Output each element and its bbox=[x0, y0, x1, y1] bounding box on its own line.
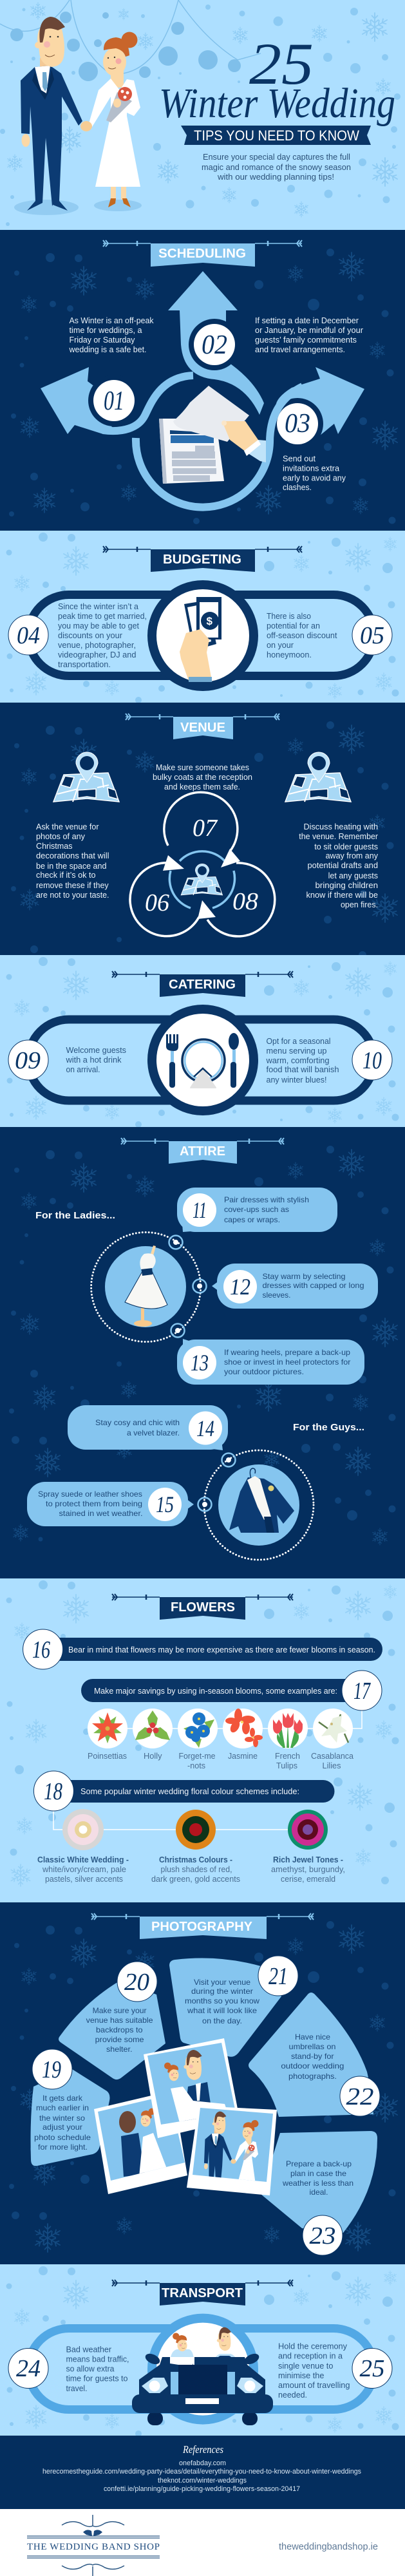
text: tip 24: time for guests to bbox=[66, 2374, 128, 2383]
segment: tip 19: for more light. bbox=[38, 2143, 88, 2152]
labels: flower names: Casablanca bbox=[311, 1752, 353, 1761]
text: tip 25: needed. bbox=[278, 2391, 307, 2400]
text: tip 02: guests’ family commitments bbox=[255, 336, 357, 345]
segment: tip 21: 21 bbox=[268, 1963, 288, 1990]
bubble: tip 11: 11 bbox=[193, 1197, 207, 1223]
text: tip 08: Discuss heating with bbox=[304, 822, 378, 831]
text: tip 25: and reception in a bbox=[278, 2352, 343, 2361]
bubble: tip 12: Stay warm by selecting bbox=[263, 1272, 345, 1281]
heading: transport bbox=[112, 2280, 293, 2306]
text: classic white: white/ivory/cream, pale bbox=[42, 1865, 126, 1874]
text: rich jewel tones: Rich Jewel Tones - bbox=[273, 1855, 343, 1864]
bubble: tip 12 bbox=[212, 1264, 378, 1309]
snow background bbox=[0, 3, 400, 226]
icon: wedding car bbox=[132, 2318, 273, 2425]
panel: footer bbox=[0, 2509, 405, 2576]
label: for the guys: For the Guys... bbox=[293, 1422, 364, 1433]
number 25 bbox=[352, 2348, 392, 2388]
panel: transport bbox=[0, 2264, 405, 2437]
illustration: bride bbox=[80, 32, 142, 211]
bubble: tip 14: a velvet blazer. bbox=[127, 1428, 180, 1437]
labels: flower names: Jasmine bbox=[228, 1752, 258, 1761]
number 24 bbox=[8, 2348, 48, 2388]
bubble: tip 12: sleeves. bbox=[263, 1291, 291, 1300]
bubble: tip 13 bbox=[177, 1339, 364, 1385]
number 08: 08 bbox=[232, 888, 258, 915]
text: tip 06: remove these if they bbox=[36, 881, 109, 890]
text: tip 07: and keeps them safe. bbox=[164, 782, 240, 791]
text: tip 24: Bad weather bbox=[66, 2345, 111, 2354]
groom in car bbox=[214, 2327, 237, 2365]
ribbon: tips you need to know: TIPS YOU NEED TO KNOW bbox=[194, 128, 359, 144]
segment: tip 20 bbox=[59, 1962, 165, 2079]
swatch: classic white bbox=[62, 1809, 104, 1850]
bubble: tip 11: Pair dresses with stylish bbox=[224, 1195, 309, 1204]
heading: budgeting: BUDGETING bbox=[163, 553, 241, 567]
text: tip 06: Christmas bbox=[36, 842, 72, 851]
segment: tip 21: during the winter bbox=[191, 1987, 253, 1996]
text: christmas colours bbox=[151, 1855, 240, 1884]
garland bbox=[0, 0, 261, 81]
labels: flower names: Tulips bbox=[276, 1761, 297, 1770]
panel: catering bbox=[0, 955, 405, 1128]
bubble: tip 14 bbox=[68, 1405, 228, 1450]
text: tip 08: let any guests bbox=[328, 871, 378, 880]
bubble: tip 13: 13 bbox=[191, 1350, 209, 1376]
segment: tip 23 bbox=[261, 2131, 377, 2255]
segment: tip 19 bbox=[31, 2049, 109, 2166]
bubble: tip 13: your outdoor pictures. bbox=[224, 1367, 304, 1376]
number 03 bbox=[272, 398, 323, 450]
connector to colour schemes bbox=[53, 1811, 308, 1830]
swatch: rich jewel tones bbox=[288, 1810, 328, 1850]
panel: venue bbox=[0, 703, 405, 997]
text: christmas colours: dark green, gold accents bbox=[151, 1875, 240, 1884]
text: tip 08 bbox=[299, 822, 379, 909]
text: tip 10: menu serving up bbox=[267, 1046, 327, 1056]
diagram: dress dial bbox=[91, 1233, 206, 1342]
text: tip 04: peak time to get married, bbox=[58, 612, 147, 621]
bar: tip 18: 18 bbox=[44, 1778, 62, 1805]
segment: tip 21: Visit your venue bbox=[194, 1978, 250, 1987]
icon: hand with money bbox=[152, 585, 254, 687]
heading: catering bbox=[112, 971, 293, 997]
labels: flower names: Poinsettias bbox=[88, 1752, 127, 1761]
text: tip 06: Ask the venue for bbox=[36, 822, 99, 831]
text: tip 07: Make sure someone takes bbox=[156, 763, 249, 772]
text: tip 05 bbox=[267, 612, 337, 659]
text: tip 01 bbox=[69, 316, 154, 354]
segment: tip 22: stand-by for bbox=[291, 2052, 334, 2061]
panel: flowers bbox=[0, 1578, 405, 1902]
logo: the wedding band shop bbox=[27, 2515, 160, 2576]
number 01: 01 bbox=[104, 386, 124, 416]
heading: photography bbox=[91, 1913, 314, 1939]
number 09: 09 bbox=[15, 1047, 41, 1074]
illustration: groom bbox=[14, 17, 82, 215]
flower: casablanca lilies bbox=[313, 1709, 353, 1748]
segment: tip 20: venue has suitable bbox=[86, 2016, 153, 2025]
bubble: tip 15: stained in wet weather. bbox=[59, 1509, 143, 1518]
text: tip 06: be in the space and bbox=[36, 862, 107, 871]
text: tip 02: and travel arrangements. bbox=[255, 345, 345, 354]
bubble: tip 13: If wearing heels, prepare a back-up bbox=[224, 1348, 350, 1357]
text: tip 10: food that will banish bbox=[267, 1065, 339, 1074]
number 04: 04 bbox=[17, 622, 40, 649]
text: christmas colours: Christmas Colours - bbox=[159, 1855, 232, 1864]
diagram: jacket dial bbox=[198, 1450, 314, 1560]
labels: flower names bbox=[88, 1752, 353, 1770]
panel: header bbox=[0, 0, 405, 230]
text: tip 10: warm, comforting bbox=[265, 1056, 330, 1065]
segment: tip 19: the winter so bbox=[39, 2114, 85, 2123]
text: tip 04: discounts on your bbox=[58, 631, 122, 640]
number 05 bbox=[352, 615, 392, 655]
bar: tip 16: Bear in mind that flowers may be more expensive as there are fewer blooms in season. bbox=[68, 1645, 375, 1654]
labels: flower names: French bbox=[275, 1752, 300, 1761]
text: tip 01: wedding is a safe bet. bbox=[69, 345, 147, 354]
reference links: confetti.ie/planning/guide-picking-wedding-flowers-season-20417 bbox=[104, 2485, 300, 2493]
bar: tip 17 bbox=[81, 1671, 382, 1710]
bubble: tip 11: capes or wraps. bbox=[224, 1215, 280, 1224]
segment: tip 20: 20 bbox=[124, 1969, 149, 1996]
intro text bbox=[202, 152, 351, 182]
reference links: theknot.com/winter-weddings bbox=[158, 2477, 247, 2485]
text: christmas colours: plush shades of red, bbox=[161, 1865, 232, 1874]
text: tip 08: open fires. bbox=[341, 900, 378, 909]
website: theweddingbandshop.ie bbox=[279, 2541, 378, 2552]
text: tip 05: There is also bbox=[267, 612, 311, 621]
pill outline bbox=[28, 2329, 374, 2410]
segment: tip 19: It gets dark bbox=[42, 2094, 83, 2103]
text: tip 04: you may be able to get bbox=[58, 621, 140, 630]
bubble: tip 11: cover-ups such as bbox=[224, 1205, 289, 1214]
text: tip 04: transportation. bbox=[58, 660, 111, 669]
icon: hand with money: $ bbox=[206, 615, 212, 627]
panel: budgeting bbox=[0, 531, 405, 703]
icon: calendar and hand bbox=[159, 386, 266, 484]
bubble: tip 11 bbox=[177, 1188, 337, 1232]
pill outline bbox=[28, 1019, 374, 1101]
text: tip 05: on your bbox=[267, 641, 294, 650]
segment: tip 22: Have nice bbox=[295, 2032, 330, 2041]
text: tip 03: invitations extra bbox=[283, 464, 339, 473]
text: tip 07: bulky coats at the reception bbox=[153, 773, 252, 782]
text: tip 25: amount of travelling bbox=[278, 2381, 350, 2390]
text: tip 02 bbox=[255, 316, 363, 354]
bubble: tip 12: 12 bbox=[230, 1274, 250, 1300]
reference links: onefabday.com bbox=[179, 2459, 226, 2467]
number 10 bbox=[352, 1040, 392, 1080]
icon: plate and cutlery bbox=[152, 1009, 254, 1111]
arrow: left 01 bbox=[41, 367, 129, 434]
segment: tip 20: backdrops to bbox=[96, 2025, 143, 2034]
heading: venue: VENUE bbox=[180, 721, 225, 735]
bubble: tip 15 bbox=[27, 1482, 194, 1526]
heading: flowers bbox=[112, 1594, 293, 1620]
text: tip 04: Since the winter isn’t a bbox=[58, 602, 138, 611]
reference links bbox=[42, 2459, 361, 2493]
segment: tip 20: provide some bbox=[95, 2035, 144, 2044]
reference links: herecomestheguide.com/wedding-party-ideas/detail/everything-you-need-to-know-about-winter-weddings bbox=[42, 2468, 361, 2476]
text: tip 24: travel. bbox=[66, 2384, 88, 2393]
segment: tip 22: outdoor wedding bbox=[281, 2061, 344, 2070]
bar: tip 18 bbox=[33, 1771, 335, 1811]
segment: tip 23: plan in case the bbox=[290, 2169, 346, 2178]
text: tip 04: videographer, DJ and bbox=[58, 650, 137, 659]
text: tip 04: venue, photographer, bbox=[58, 641, 136, 650]
heading: attire bbox=[121, 1138, 284, 1164]
intro text: Ensure your special day captures the full bbox=[203, 152, 350, 162]
text: tip 25: minimise the bbox=[278, 2371, 324, 2380]
icon: map left bbox=[53, 752, 119, 802]
heading: venue bbox=[126, 714, 279, 739]
text: rich jewel tones bbox=[271, 1855, 345, 1884]
heading: flowers: FLOWERS bbox=[171, 1600, 235, 1615]
text: classic white: pastels, silver accents bbox=[45, 1875, 123, 1884]
bar: tip 17: Make major savings by using in-season blooms, some examples are: bbox=[94, 1686, 337, 1696]
flower: jasmine bbox=[223, 1709, 263, 1748]
arrow: right 03 bbox=[276, 367, 364, 444]
text: tip 06: photos of any bbox=[36, 832, 86, 841]
text: tip 09: on arrival. bbox=[66, 1065, 100, 1074]
number 24: 24 bbox=[16, 2355, 41, 2382]
heading: transport: TRANSPORT bbox=[162, 2286, 243, 2300]
labels: flower names: Forget-me bbox=[179, 1752, 216, 1761]
swatch: christmas colours bbox=[176, 1810, 216, 1850]
panel: scheduling bbox=[0, 230, 405, 531]
segment: tip 20: Make sure your bbox=[93, 2006, 147, 2015]
text: tip 07 bbox=[153, 763, 252, 791]
bubble: tip 12: dresses with capped or long bbox=[263, 1281, 364, 1290]
text: tip 02: or January, be mindful of your bbox=[255, 326, 363, 335]
photo: groom carrying bride bbox=[144, 2038, 240, 2138]
text: tip 05: potential for an bbox=[267, 621, 320, 630]
heading: photography: PHOTOGRAPHY bbox=[151, 1920, 253, 1934]
segment: tip 21 bbox=[169, 1956, 298, 2057]
text: tip 06: are not to your taste. bbox=[36, 891, 109, 900]
number 05: 05 bbox=[360, 622, 384, 649]
segment: tip 22 bbox=[249, 1993, 380, 2117]
text: tip 03 bbox=[283, 455, 346, 492]
text: tip 05: off-season discount bbox=[267, 631, 337, 640]
label: for the ladies: For the Ladies... bbox=[35, 1210, 115, 1221]
segment: tip 20: shelter. bbox=[106, 2045, 133, 2054]
number 03: 03 bbox=[285, 409, 310, 439]
text: tip 06 bbox=[36, 822, 109, 900]
bar: tip 18: Some popular winter wedding floral colour schemes include: bbox=[80, 1786, 299, 1796]
text: tip 24: means bad traffic, bbox=[66, 2355, 129, 2364]
logo: the wedding band shop: THE WEDDING BAND SHOP bbox=[27, 2542, 160, 2552]
segment: tip 21: months so you know bbox=[185, 1996, 259, 2005]
heading: scheduling bbox=[103, 240, 302, 267]
panel: attire bbox=[0, 1127, 405, 1578]
circular band bbox=[103, 375, 303, 507]
text: tip 03: early to avoid any bbox=[283, 474, 346, 483]
text: rich jewel tones: cerise, emerald bbox=[281, 1875, 335, 1884]
heading: catering: CATERING bbox=[169, 978, 236, 992]
text: tip 02: If setting a date in December bbox=[255, 316, 359, 325]
segment: tip 23: 23 bbox=[309, 2222, 336, 2249]
intro text: with our wedding planning tips! bbox=[217, 172, 334, 182]
segment: tip 19: 19 bbox=[42, 2056, 61, 2083]
segment: tip 19: photo schedule bbox=[34, 2133, 91, 2142]
flower: poinsettia bbox=[88, 1708, 127, 1748]
text: tip 08: to sit older guests bbox=[314, 842, 378, 851]
text: tip 10: Opt for a seasonal bbox=[267, 1037, 331, 1046]
segment: tip 21: on the day. bbox=[202, 2016, 242, 2025]
bar: tip 17: 17 bbox=[353, 1678, 371, 1705]
text: tip 08: know if there will be bbox=[306, 891, 378, 900]
text: tip 25: single venue to bbox=[278, 2362, 333, 2371]
icon: jacket bbox=[229, 1468, 294, 1533]
text: tip 01: Friday or Saturday bbox=[70, 336, 135, 345]
text: tip 24 bbox=[66, 2345, 129, 2393]
diagram: three looping arrows bbox=[130, 792, 275, 936]
segment: tip 19: adjust your bbox=[42, 2123, 82, 2132]
photo: couple holding hands bbox=[187, 2106, 277, 2201]
bride in car bbox=[170, 2333, 194, 2365]
number 10: 10 bbox=[363, 1047, 382, 1074]
segment: tip 22: umbrellas on bbox=[288, 2042, 336, 2051]
panel: photography bbox=[0, 1902, 405, 2264]
flower: forget-me-nots bbox=[178, 1709, 218, 1748]
bar: tip 16: 16 bbox=[32, 1636, 50, 1663]
text: tip 01: time for weddings, a bbox=[70, 326, 142, 335]
text: classic white bbox=[37, 1855, 129, 1884]
text: tip 05: honeymoon. bbox=[267, 650, 312, 659]
panel: references bbox=[0, 2436, 405, 2509]
text: tip 09: with a hot drink bbox=[65, 1056, 122, 1065]
segment: tip 21: what it will look like bbox=[187, 2006, 257, 2015]
text: tip 24: so allow extra bbox=[66, 2365, 115, 2374]
number 02 bbox=[189, 319, 240, 370]
text: tip 08: potential drafts and bbox=[308, 861, 378, 870]
segment: tip 23: weather is less than bbox=[282, 2179, 353, 2188]
bubble: tip 14: Stay cosy and chic with bbox=[95, 1418, 180, 1427]
heading: scheduling: SCHEDULING bbox=[158, 247, 246, 261]
flower: tulips bbox=[268, 1709, 308, 1748]
text: tip 04 bbox=[58, 602, 147, 669]
segment: tip 23: Prepare a back-up bbox=[286, 2159, 352, 2168]
number 02: 02 bbox=[202, 330, 227, 360]
text: tip 10: any winter blues! bbox=[267, 1075, 327, 1084]
text: tip 09: Welcome guests bbox=[66, 1046, 126, 1055]
labels: flower names: Holly bbox=[144, 1752, 162, 1761]
bubble: tip 15: 15 bbox=[156, 1492, 174, 1517]
heading: references: References bbox=[182, 2443, 223, 2456]
icon: map right bbox=[285, 752, 351, 802]
flower: holly bbox=[133, 1709, 173, 1748]
text: tip 08: the venue. Remember bbox=[299, 832, 378, 841]
number 06: 06 bbox=[145, 889, 169, 916]
labels: flower names: Lilies bbox=[322, 1761, 341, 1770]
heading: attire: ATTIRE bbox=[180, 1144, 225, 1159]
text: tip 01: As Winter is an off-peak bbox=[70, 316, 154, 325]
number 09 bbox=[8, 1040, 48, 1080]
segment: tip 23: ideal. bbox=[309, 2188, 328, 2197]
bar: tip 16 bbox=[23, 1629, 382, 1669]
text: tip 08: away from any bbox=[326, 851, 379, 860]
number 01 bbox=[88, 375, 140, 426]
photo: couple embracing bbox=[94, 2090, 187, 2194]
bubble: tip 15: Spray suede or leather shoes bbox=[38, 1490, 142, 1499]
pill outline bbox=[28, 595, 374, 676]
title: 25: 25 bbox=[249, 31, 314, 97]
text: tip 25 bbox=[278, 2342, 350, 2400]
text: tip 09 bbox=[65, 1046, 126, 1074]
text: tip 06: check if it’s ok to bbox=[36, 871, 96, 880]
connector to flowers bbox=[88, 1710, 362, 1728]
arrow: up 02 bbox=[168, 271, 264, 415]
number 04 bbox=[8, 615, 48, 655]
text: tip 03: Send out bbox=[283, 455, 316, 464]
text: tip 06: decorations that will bbox=[36, 851, 109, 860]
snow background extras bbox=[10, 1765, 397, 1886]
bubble: tip 13: shoe or invest in heel protectors for bbox=[224, 1358, 350, 1367]
heading: budgeting bbox=[103, 546, 302, 572]
bubble: tip 14: 14 bbox=[196, 1416, 214, 1441]
segment: tip 22: 22 bbox=[346, 2083, 373, 2110]
text: rich jewel tones: amethyst, burgundy, bbox=[271, 1865, 345, 1874]
bubble: tip 15: to protect them from being bbox=[46, 1499, 142, 1508]
icon: central map bbox=[181, 864, 223, 895]
segment: tip 19: much earlier in bbox=[36, 2103, 89, 2112]
labels: flower names: -nots bbox=[187, 1761, 205, 1770]
text: classic white: Classic White Wedding - bbox=[37, 1855, 129, 1864]
text: tip 25: Hold the ceremony bbox=[278, 2342, 348, 2351]
number 07: 07 bbox=[193, 815, 218, 842]
segment: tip 22: photographs. bbox=[288, 2072, 337, 2081]
icon: dress bbox=[125, 1245, 167, 1327]
number 25: 25 bbox=[359, 2355, 385, 2382]
text: tip 10 bbox=[265, 1037, 339, 1084]
text: tip 03: clashes. bbox=[283, 483, 312, 492]
intro text: magic and romance of the snowy season bbox=[202, 162, 351, 172]
text: tip 08: bringing children bbox=[316, 881, 378, 890]
